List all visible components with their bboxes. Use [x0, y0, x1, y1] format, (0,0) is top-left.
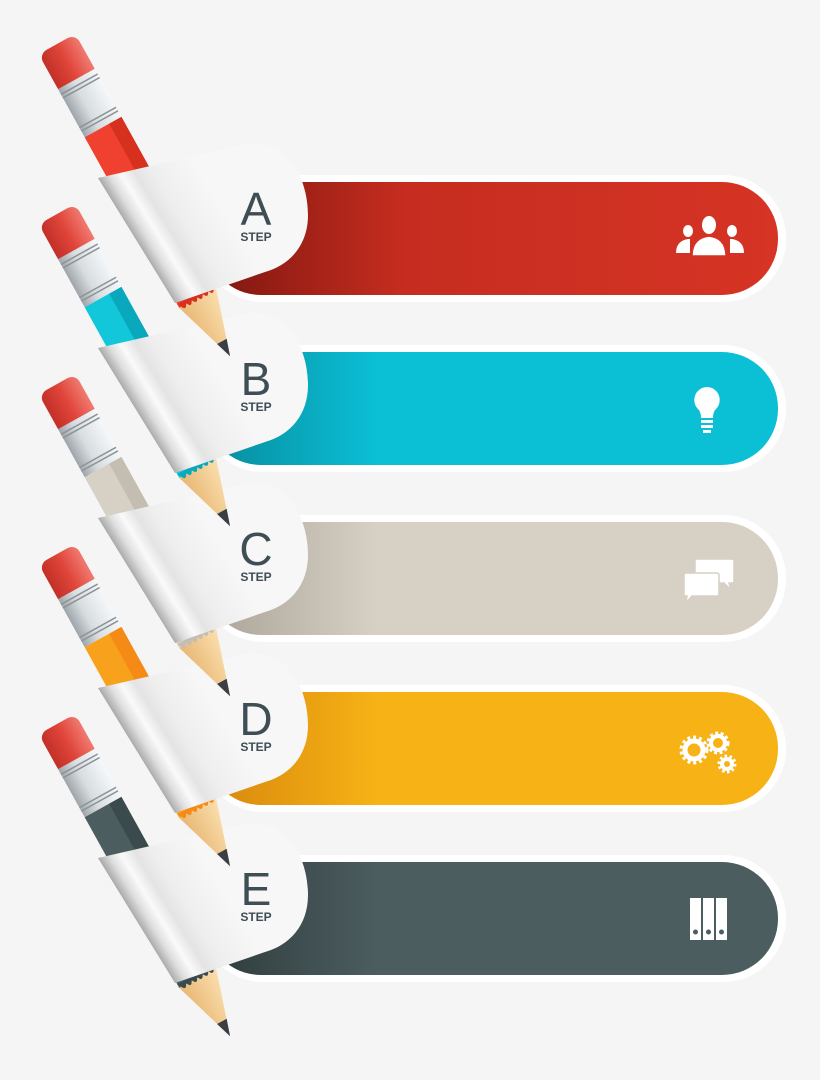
step A [39, 34, 786, 366]
step C [39, 374, 786, 706]
bar C [200, 515, 786, 642]
letter B: B [241, 353, 271, 405]
pencil C [39, 374, 248, 706]
icon: speech bubbles [684, 559, 734, 603]
letter C: C [239, 523, 273, 575]
pencil E [39, 714, 248, 1046]
wrap E: STEP [240, 910, 272, 924]
bar D [200, 685, 786, 812]
step E [39, 714, 786, 1046]
bar E [200, 855, 786, 982]
bar B [200, 345, 786, 472]
icon: light bulb [694, 387, 720, 433]
wrap C [98, 483, 308, 643]
wrap D: STEP [240, 740, 272, 754]
bar A [200, 175, 786, 302]
wrap A: STEP [240, 230, 272, 244]
icon: people [676, 216, 744, 256]
wrap B: STEP [240, 400, 272, 414]
letter A: A [241, 183, 272, 235]
letter D: D [239, 693, 273, 745]
pencil D [39, 544, 248, 876]
wrap B [98, 313, 308, 473]
pencil B [39, 204, 248, 536]
icon: gears [681, 733, 735, 772]
pencil A [39, 34, 248, 366]
letter E: E [241, 863, 271, 915]
step B [39, 204, 786, 536]
step D [39, 544, 786, 876]
wrap E [98, 823, 308, 983]
icon: binders [690, 898, 727, 940]
wrap C: STEP [240, 570, 272, 584]
wrap D [98, 653, 308, 813]
wrap A [98, 143, 308, 303]
